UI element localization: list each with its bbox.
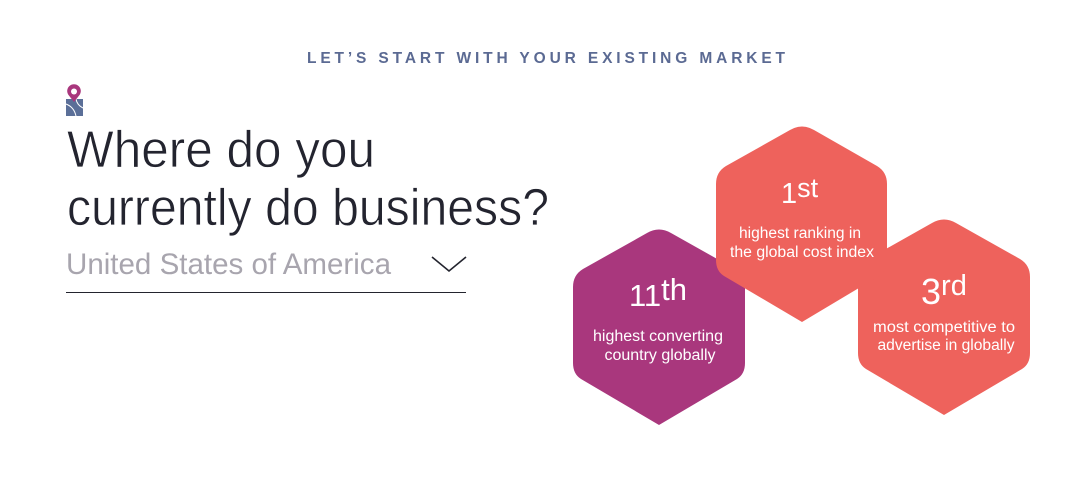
hexagon: 1st: 1 [781, 178, 797, 210]
hexagon: 11th [573, 230, 745, 425]
country dropdown: United States of America [66, 248, 391, 281]
hexagon: 3rd: 3 [921, 271, 941, 312]
icon: map pin [66, 84, 83, 116]
hexagon: 1st: highest ranking in [739, 225, 861, 242]
hexagon: 3rd: most competitive to [873, 319, 1015, 336]
main heading: Where do you [67, 121, 375, 179]
eyebrow heading: LET’S START WITH YOUR EXISTING MARKET [307, 50, 786, 67]
hexagon: 11th: highest converting [593, 328, 723, 345]
hexagon: 3rd: rd [941, 270, 967, 302]
hexagon: 3rd: advertise in globally [878, 337, 1015, 354]
hexagon: 1st: the global cost index [730, 244, 874, 261]
country dropdown [66, 248, 466, 293]
hexagon: 11th: 11 [629, 278, 661, 313]
hexagon: 11th: th [661, 272, 687, 307]
main heading: currently do business? [67, 179, 549, 237]
hexagon: 3rd [858, 220, 1030, 415]
hexagon: 1st: st [797, 173, 819, 203]
hexagon: 1st [716, 126, 887, 322]
main heading [67, 121, 549, 237]
hexagon: 11th: country globally [604, 347, 716, 364]
